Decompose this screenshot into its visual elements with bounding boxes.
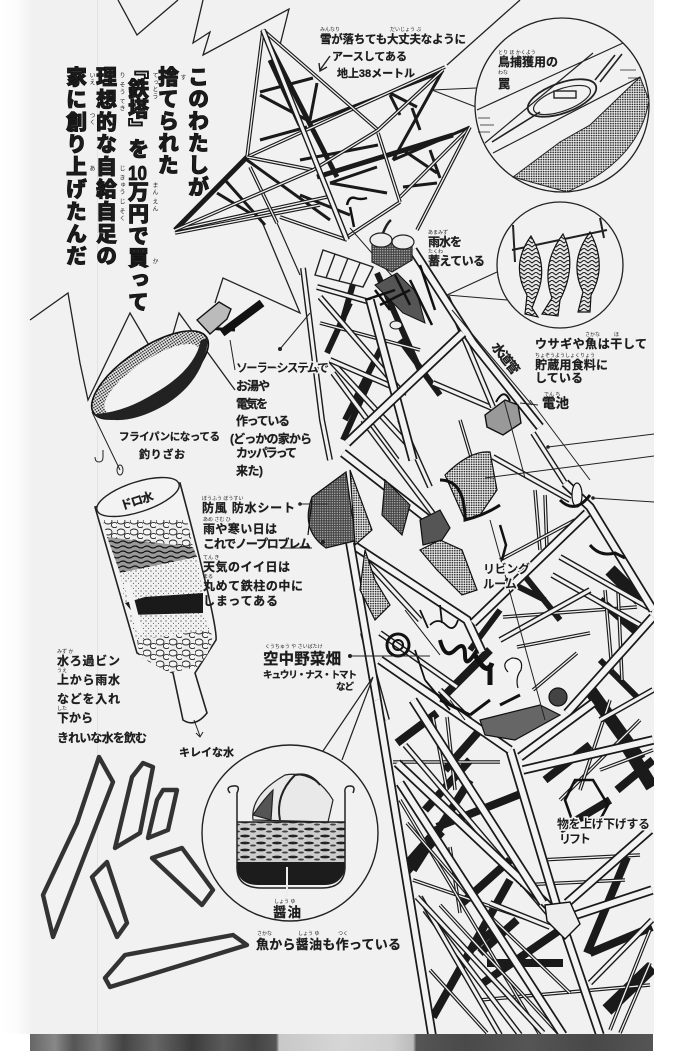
title furigana: じ きゅう じ そく [118, 165, 125, 222]
title column 5: 家に創り上げたんだ [64, 66, 87, 268]
pot outline [228, 786, 354, 888]
leader lines on the right side [230, 313, 654, 720]
text: windproof sheet: 防風 防水シート [202, 500, 295, 515]
text: solar system: お湯や [236, 378, 270, 393]
battery [485, 394, 521, 435]
drying pole [512, 218, 607, 262]
tower medium beams [303, 268, 653, 1035]
handle tube [222, 303, 262, 333]
text: drying food: ちょぞうようしょくりょう [535, 352, 595, 359]
text: living room: リビング [483, 561, 530, 576]
fish layer [237, 822, 345, 862]
title furigana: いえ [88, 72, 95, 86]
title in vertical text [64, 58, 209, 313]
glass highlight [127, 583, 140, 633]
lower sand layer [128, 613, 210, 640]
text: filter bottle explanation: 上から雨水 [57, 672, 120, 687]
tower top star frame [175, 30, 470, 275]
text: filter bottle explanation: 下から [57, 711, 93, 725]
text: earthing note: みんなり [320, 26, 340, 33]
text: sky garden label: 空中野菜畑 [263, 649, 341, 668]
text: filter bottle explanation: 水ろ過ビン [57, 653, 120, 668]
text: windproof sheet: 天気のイイ日は [203, 559, 290, 574]
text: windproof sheet: まる [203, 574, 213, 580]
gusset plate at central node [545, 902, 580, 939]
trap label: わな [498, 69, 508, 76]
text: solar system: (どっかの家から [230, 431, 312, 446]
lift basket [565, 780, 608, 820]
text: sky garden label: など [336, 681, 354, 693]
text: filter bottle explanation [57, 648, 147, 745]
scanned bottom edge strip [30, 1034, 653, 1051]
text: lift label [557, 816, 650, 846]
text: earthing note: 地上38メートル [337, 66, 415, 80]
title column 3 number: 10 [128, 163, 147, 185]
text: solar system: ソーラーシステムで [236, 361, 329, 375]
hanging clutter: water pipe [350, 228, 590, 480]
text: frying pan label: 釣りざお [139, 447, 185, 461]
frying pan fishing rod [79, 302, 262, 475]
soy sauce layer [237, 862, 345, 885]
bottle opening [92, 469, 184, 525]
text: windproof sheet [202, 495, 311, 608]
text: rainwater: あまみず [428, 229, 448, 236]
title furigana: てっとう [151, 72, 158, 100]
text: filter bottle explanation: した [57, 706, 67, 712]
text: frying pan label: フライパンになってる [119, 431, 220, 443]
text: sky garden label: くうちゅう や さいばたけ [265, 643, 323, 650]
text: windproof sheet: てん き [203, 554, 219, 561]
trap label [498, 49, 558, 91]
text: clean water: キレイな水 [179, 745, 234, 759]
text: frying pan label [119, 431, 220, 461]
wavy layer [107, 537, 197, 573]
trap label: 鳥捕獲用の [498, 54, 558, 69]
stove and smoke [440, 658, 567, 740]
hook gadget [347, 198, 367, 227]
text: windproof sheet: 雨や寒い日は [203, 521, 277, 536]
title furigana [88, 72, 186, 265]
text: filter bottle explanation: みず か [57, 648, 73, 655]
tower: dark background struts [327, 270, 653, 1017]
trap callout tail [432, 88, 476, 107]
text: windproof sheet: しまってある [203, 594, 278, 608]
muddy water label: ドロ水 [118, 488, 155, 513]
fish 1 [519, 236, 542, 317]
soy sauce label: 醤油 [273, 905, 301, 920]
reel [197, 302, 231, 334]
text: earthing note: 雪が落ちても大丈夫なように [320, 32, 466, 46]
text: rainwater [428, 229, 485, 268]
pan dark rim [96, 338, 208, 420]
text: soy sauce from fish [256, 930, 401, 952]
text: earthing note: アースしてある [332, 50, 407, 63]
trap label: 罠 [498, 77, 510, 91]
soy circle [202, 745, 378, 921]
doon sound effect [43, 757, 247, 987]
wood block shaded face [513, 77, 649, 192]
fish callout tail [447, 272, 507, 300]
top rock layer [103, 520, 193, 547]
title furigana: す [179, 74, 186, 81]
trap circle [475, 18, 649, 192]
text: filter bottle explanation: などを入れ [57, 691, 120, 706]
fish circle [497, 202, 623, 328]
bottle outline [95, 483, 216, 723]
leader dots [278, 347, 595, 658]
text: lift label: 物を上げ下げする [557, 816, 650, 831]
soy sauce leader [286, 867, 288, 897]
water filter bottle [92, 469, 216, 737]
text: rainwater: 蓄えている [428, 254, 485, 268]
text: filter bottle explanation: きれいな水を飲む [57, 730, 147, 745]
text: solar system: 作っている [236, 413, 290, 428]
title column 4: 理想的な自給自足の [94, 66, 117, 268]
pan body [79, 315, 221, 435]
text: living room: ルーム [483, 577, 517, 591]
text: solar system [230, 361, 329, 478]
arrow to clean water [194, 720, 203, 737]
trap label: とり ほ かくよう [498, 49, 536, 56]
fishing line and hook [92, 412, 120, 470]
float [117, 465, 123, 475]
text: drying food: さかな [585, 331, 600, 338]
sand layer [120, 557, 203, 603]
text: rainwater: たくわ [428, 248, 443, 255]
callout: bird trap [432, 18, 649, 192]
right page margin [654, 0, 679, 1051]
title furigana: り そう てき [118, 72, 125, 112]
speech burst outline around the title [30, 0, 520, 400]
text: living room [483, 561, 530, 591]
title column 2: 捨てられた [156, 66, 179, 176]
text: rainwater: 雨水を [428, 234, 462, 249]
living room with blanket and seats [360, 452, 625, 620]
text: drying food: ほ [614, 332, 619, 338]
clutter at the tower head [365, 265, 435, 329]
text: solar system: カッパラって [236, 446, 297, 460]
arrow to earth [319, 56, 330, 71]
stone weight [253, 774, 333, 822]
title column 3 first part: 『鉄塔』を [126, 58, 149, 158]
text: water pipe label: 水道管 [489, 340, 523, 377]
pan inside [95, 332, 209, 426]
callout: drying fish [447, 202, 623, 328]
text: windproof sheet: 丸めて鉄柱の中に [203, 578, 303, 593]
text: drying food [535, 331, 647, 385]
solar panels [315, 250, 373, 287]
text: earthing note [319, 26, 466, 80]
text: soy sauce from fish: さかな [257, 930, 272, 937]
bottom rock layer [137, 630, 212, 673]
text: filter bottle explanation: うえ [57, 668, 67, 674]
text: soy sauce from fish: つく [338, 931, 348, 937]
tower thin lattice beams [320, 323, 653, 1035]
fish 2 [542, 234, 570, 316]
title column 1: このわたしが [186, 66, 209, 198]
callout: soy sauce: しょう ゆ [274, 899, 295, 905]
text: soy sauce from fish: しょう ゆ [298, 931, 319, 937]
text: drying food: している [535, 371, 583, 385]
text: lift label: リフト [559, 832, 591, 846]
text: windproof sheet: あめ さむ ひ [203, 516, 231, 523]
soy callout tail [323, 677, 373, 760]
callout: soy sauce [202, 677, 378, 921]
title furigana: つく [88, 112, 95, 126]
title column 3 second part: 万円で買って [126, 181, 149, 313]
title furigana: まん えん [151, 182, 158, 213]
sky vegetable garden [387, 605, 492, 720]
text: windproof sheet: ぼうふう ぼうすい [202, 495, 243, 502]
text: solar system: 来た) [236, 463, 263, 478]
title furigana: あ [88, 165, 95, 172]
title furigana: か [151, 258, 158, 265]
rainwater tanks [370, 220, 414, 272]
text: battery label: 電池 [542, 396, 570, 411]
fish 3 [577, 232, 599, 312]
text: soy sauce from fish: 魚から醤油も作っている [256, 937, 401, 952]
text: earthing note: だいじょう ぶ [390, 27, 421, 33]
wood block and snare [477, 43, 640, 153]
text: drying food: ウサギや魚は干して [535, 336, 647, 351]
black charcoal layer [125, 593, 203, 627]
text: windproof sheet: これでノープロブレム [203, 536, 311, 551]
tower main beams [343, 250, 653, 1035]
windproof sheet [308, 470, 372, 548]
text: drying food: 貯蔵用食料に [535, 357, 608, 372]
text: sky garden label: キュウリ・ナス・トマト [263, 670, 357, 681]
text: battery label: でん ち [544, 392, 560, 398]
text: solar system: 電気を [236, 396, 268, 411]
text: sky garden label [263, 643, 357, 693]
